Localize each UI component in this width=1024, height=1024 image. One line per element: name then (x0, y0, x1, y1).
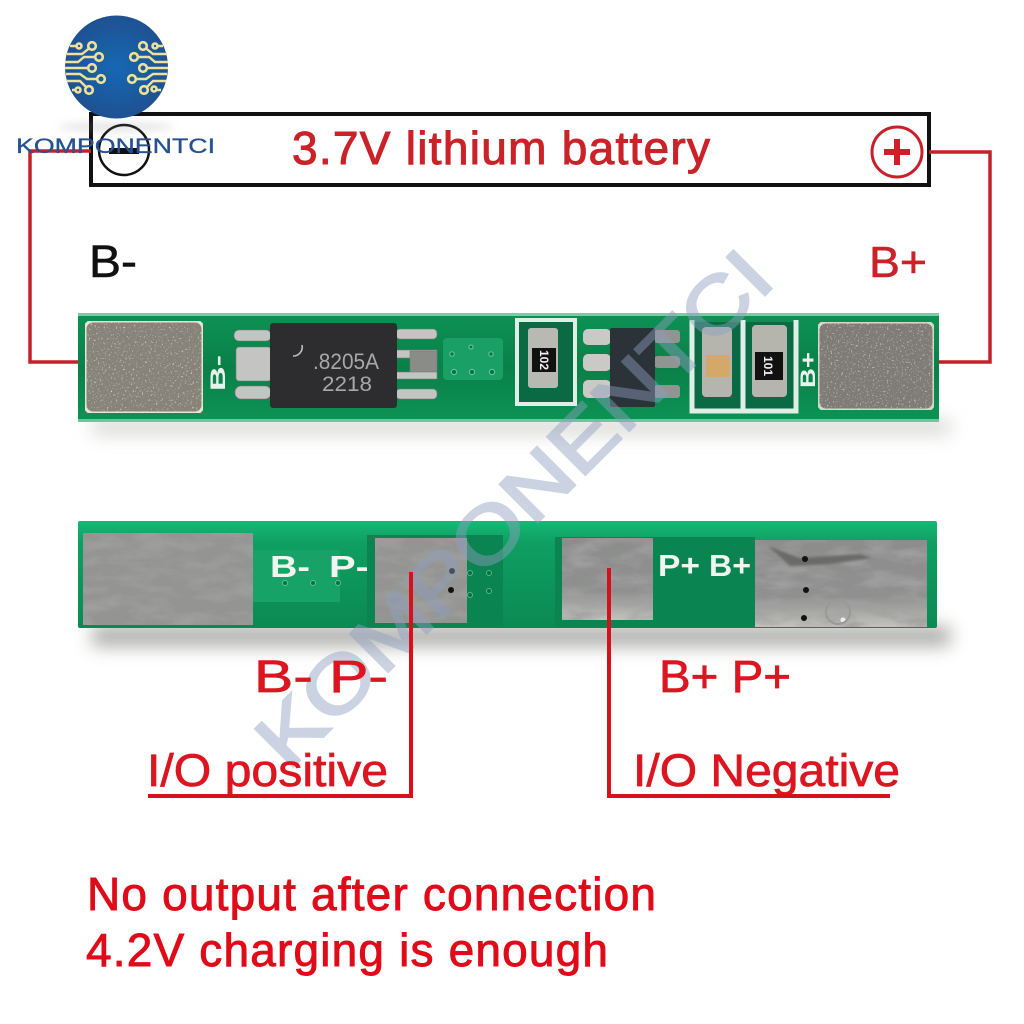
label: I/O positive: I/O positive (147, 745, 388, 796)
B- / P- silk area: P- (329, 549, 369, 584)
logo wordmark: KOMPONENTCI (16, 135, 215, 158)
note text: No output after connection (87, 868, 656, 920)
middle-right solder pad (555, 537, 755, 627)
note text: 4.2V charging is enough (86, 924, 608, 976)
silkscreen: P+ B+ (658, 548, 751, 583)
logo (16, 16, 215, 158)
wire: battery negative to B- pad (30, 151, 91, 362)
battery box (91, 114, 929, 185)
right solder pad (755, 540, 927, 627)
B- / P- silk area: B- (270, 549, 310, 584)
resistor 102 with silk box: 102 (537, 350, 551, 370)
silkscreen: P+ B+: P+ (658, 548, 700, 583)
board shadows (92, 420, 950, 646)
label: B- P-: B- P- (254, 651, 388, 702)
panel: top side of protection board (78, 313, 939, 422)
label: B-: B- (89, 236, 137, 287)
left solder pad (83, 533, 253, 625)
note text (86, 868, 656, 976)
chip: 8205A: 2218 (322, 373, 372, 396)
MOSFET leads left (234, 330, 271, 399)
wire: battery positive to B+ pad (929, 152, 990, 362)
icon: positive terminal (872, 127, 922, 177)
left battery pad (85, 321, 203, 413)
icon: negative terminal (99, 125, 149, 175)
panel: bottom side of protection board (78, 521, 937, 628)
label: B+: B+ (869, 238, 927, 287)
watermark: KOMPONENTCI (238, 232, 789, 784)
capacitor and resistor 101 with silk frame (692, 320, 796, 411)
via field (443, 338, 503, 380)
logo emblem (65, 16, 168, 118)
silkscreen: B-: B- (207, 355, 230, 391)
middle-left solder pad with vias (367, 535, 503, 627)
leader line: I/O negative (609, 568, 890, 796)
chip: 8205A (270, 323, 397, 408)
resistor 102 with silk box (517, 320, 575, 404)
battery title: 3.7V lithium battery (292, 122, 710, 174)
leader line: I/O positive (148, 572, 411, 796)
label: B+ P+: B+ P+ (659, 651, 791, 702)
MOSFET leads right (396, 329, 437, 399)
label: I/O Negative: I/O Negative (633, 745, 900, 796)
silkscreen: P+ B+: B+ (709, 548, 751, 583)
protection IC (583, 328, 680, 407)
capacitor and resistor 101 with silk frame: 101 (761, 356, 775, 376)
right battery pad (818, 322, 934, 410)
B- / P- silk area (253, 549, 369, 602)
chip: 8205A: .8205A (313, 349, 379, 374)
silkscreen: B+: B+ (797, 352, 820, 388)
